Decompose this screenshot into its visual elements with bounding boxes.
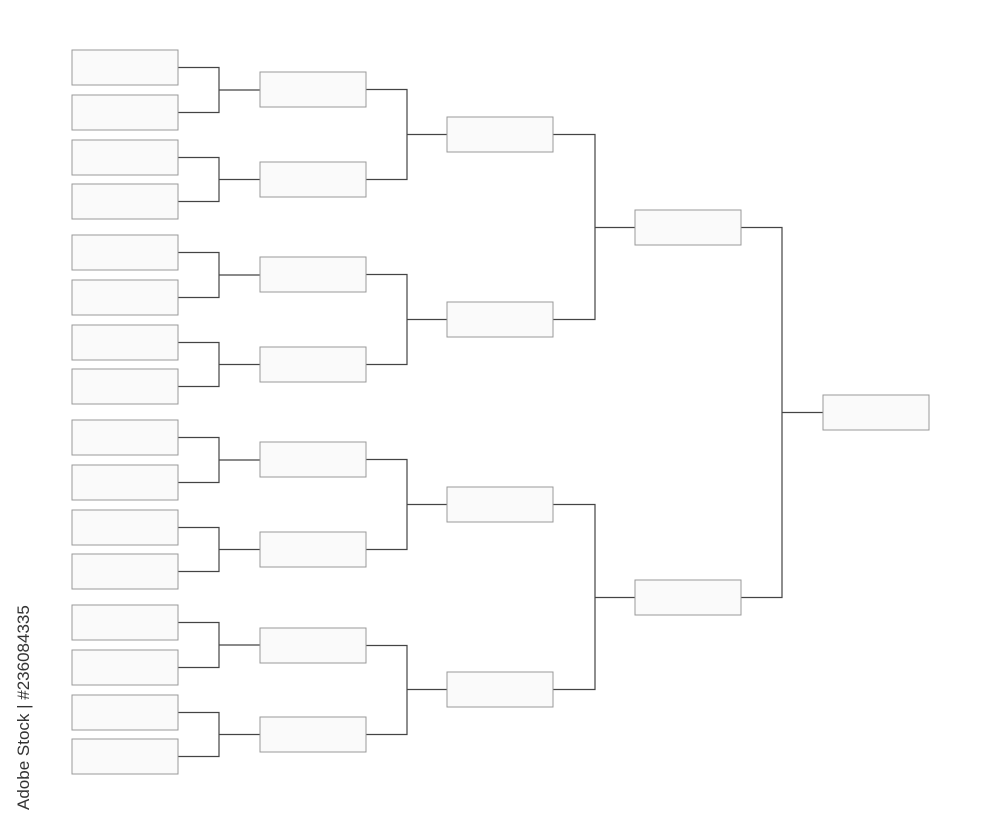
round 4 [635,210,741,615]
connector lines [178,68,823,756]
bracket boxes [72,50,929,774]
final box [823,395,929,430]
round 1 [72,50,178,774]
round 3 [447,117,553,707]
round 2 [260,72,366,752]
watermark id text: Adobe Stock | #236084335 [14,605,33,810]
